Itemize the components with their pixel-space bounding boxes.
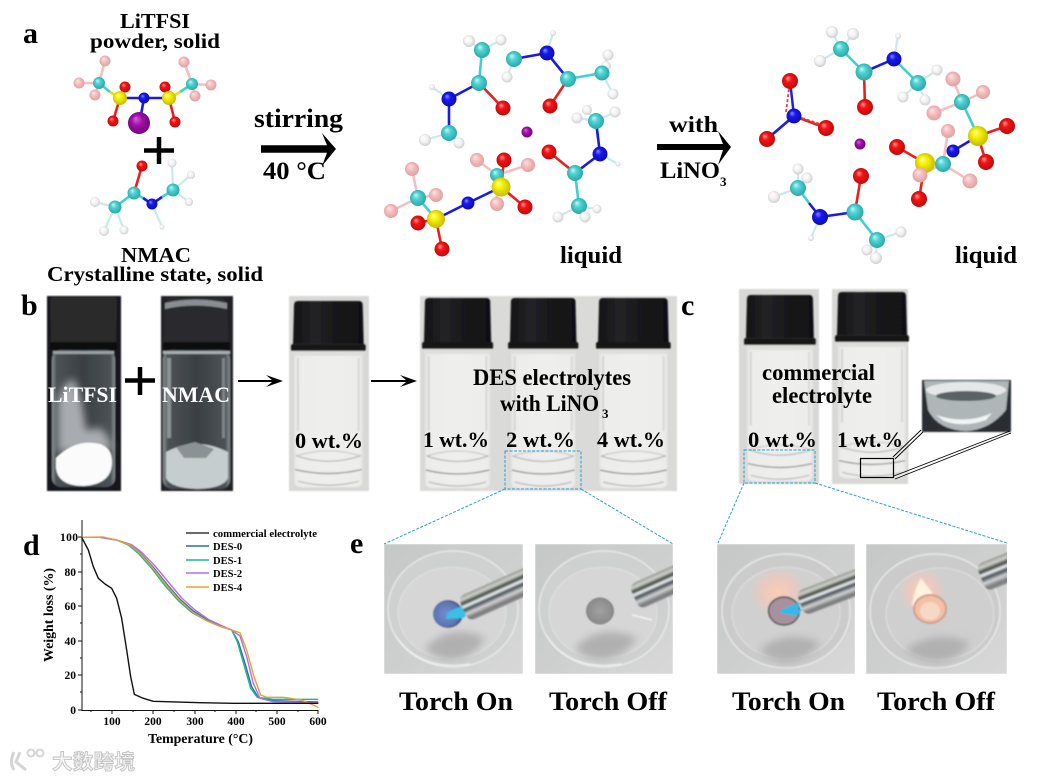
chart: TGA weight loss vs temperature <box>41 520 327 747</box>
arrow: stirring at 40 °C <box>254 104 343 185</box>
photo: DES electrolytes with LiNO3: 2 wt.% <box>506 427 575 452</box>
photo: DES electrolytes with LiNO3: 1 wt.% <box>423 427 489 452</box>
photo: DES electrolytes with LiNO3: with LiNO <box>500 391 599 416</box>
caption: Torch On / Torch Off (commercial): Torch On <box>732 687 846 716</box>
panel e label: e <box>350 527 363 560</box>
tick labels: 0 <box>70 705 76 717</box>
photo: NMAC crystals vial: NMAC <box>162 382 230 407</box>
chart: TGA weight loss vs temperature: 200 <box>144 716 162 728</box>
photo: commercial electrolyte vials: commercial <box>762 360 875 385</box>
caption: Torch On / Torch Off (commercial) <box>732 687 995 716</box>
chart: TGA weight loss vs temperature: 100 <box>103 716 121 728</box>
label: liquid (middle): liquid <box>560 243 623 269</box>
molecule: liquid DES cluster <box>384 30 620 256</box>
plus sign <box>144 137 174 164</box>
plus sign between vials <box>125 367 155 395</box>
photo: NMAC crystals vial <box>161 296 233 491</box>
photo: DES Torch Off <box>535 544 673 674</box>
panel a label: a <box>23 17 38 50</box>
chart: TGA weight loss vs temperature: Weight loss (%) <box>41 568 56 662</box>
caption: Torch On / Torch Off (DES) <box>399 687 667 716</box>
watermark: 大数跨境 <box>52 745 135 775</box>
molecule: LiTFSI <box>74 56 216 134</box>
curves <box>82 537 318 707</box>
arrow: with LiNO3: with <box>669 112 718 137</box>
tick labels <box>60 532 78 717</box>
tick labels: 100 <box>60 532 78 544</box>
photo: DES electrolytes with LiNO3: 4 wt.% <box>597 427 665 452</box>
arrow: with LiNO3: 3 <box>720 174 727 189</box>
photo: DES electrolytes with LiNO3 <box>420 296 677 491</box>
photo: commercial electrolyte vials <box>739 289 909 484</box>
zoom callout: panel c to panel e <box>718 450 1007 543</box>
arrow: stirring at 40 °C: 40 °C <box>263 158 326 185</box>
panel a: LiTFSI heading: LiTFSI <box>120 9 190 33</box>
photo: commercial Torch On <box>717 544 855 674</box>
photo: DES electrolytes with LiNO3: 3 <box>602 406 609 421</box>
molecule: NMAC <box>90 158 195 236</box>
caption: Torch On / Torch Off (commercial): Torch Off <box>877 687 995 716</box>
chart: TGA weight loss vs temperature: 300 <box>186 716 204 728</box>
photo: commercial electrolyte vials: 1 wt.% <box>837 427 903 452</box>
panel a: LiTFSI heading <box>90 9 220 53</box>
panel b label: b <box>21 289 38 322</box>
legend: DES-4 <box>213 583 243 594</box>
axis titles: Temperature (°C) <box>148 732 253 747</box>
legend <box>186 529 317 594</box>
arrow: to LiNO3 samples <box>371 375 417 387</box>
panel c label: c <box>681 289 694 322</box>
chart: TGA weight loss vs temperature: 500 <box>268 716 286 728</box>
panel d label: d <box>23 529 40 562</box>
inset: deposit close-up <box>922 380 1011 432</box>
photo: LiTFSI powder vial: LiTFSI <box>48 382 117 407</box>
arrow: with LiNO3 <box>657 112 731 189</box>
tick labels: 40 <box>64 636 76 648</box>
axes <box>78 520 318 714</box>
chart: TGA weight loss vs temperature: 600 <box>309 716 327 728</box>
tick labels: 80 <box>64 567 76 579</box>
caption: Torch On / Torch Off (DES): Torch Off <box>549 687 667 716</box>
arrow: to 0 wt.% <box>238 375 283 387</box>
watermark <box>12 745 135 775</box>
tick labels: 20 <box>64 670 76 682</box>
molecule: liquid with nitrate <box>759 26 1015 264</box>
photo: LiTFSI powder vial <box>47 296 121 491</box>
panel a: NMAC heading: Crystalline state, solid <box>47 262 263 286</box>
legend: commercial electrolyte <box>213 529 317 540</box>
photo: commercial electrolyte vials: 0 wt.% <box>748 427 817 452</box>
callout: 1 wt.% magnifier <box>860 430 1011 479</box>
photo: 0 wt.% DES electrolyte: 0 wt.% <box>295 428 363 453</box>
label: liquid (right): liquid <box>955 243 1018 269</box>
chart: TGA weight loss vs temperature: 400 <box>227 716 245 728</box>
panel a: LiTFSI heading: powder, solid <box>90 29 220 53</box>
photo: 0 wt.% DES electrolyte <box>289 296 369 491</box>
zoom callout: panel b to panel e <box>384 451 673 544</box>
photo: commercial Torch Off with flame <box>866 544 1007 674</box>
photo: commercial electrolyte vials: electrolyte <box>772 383 872 408</box>
caption: Torch On / Torch Off (DES): Torch On <box>399 687 514 716</box>
panel a: NMAC heading <box>47 243 263 286</box>
photo: DES electrolytes with LiNO3: DES electrolytes <box>473 365 631 390</box>
legend: DES-1 <box>213 556 242 567</box>
arrow: with LiNO3: LiNO <box>660 158 720 183</box>
arrow: stirring at 40 °C: stirring <box>254 104 343 133</box>
legend: DES-2 <box>213 569 242 580</box>
legend: DES-0 <box>213 542 242 553</box>
photo: DES Torch On <box>384 544 523 674</box>
panel a: NMAC heading: NMAC <box>121 243 191 267</box>
tick labels: 60 <box>64 601 76 613</box>
